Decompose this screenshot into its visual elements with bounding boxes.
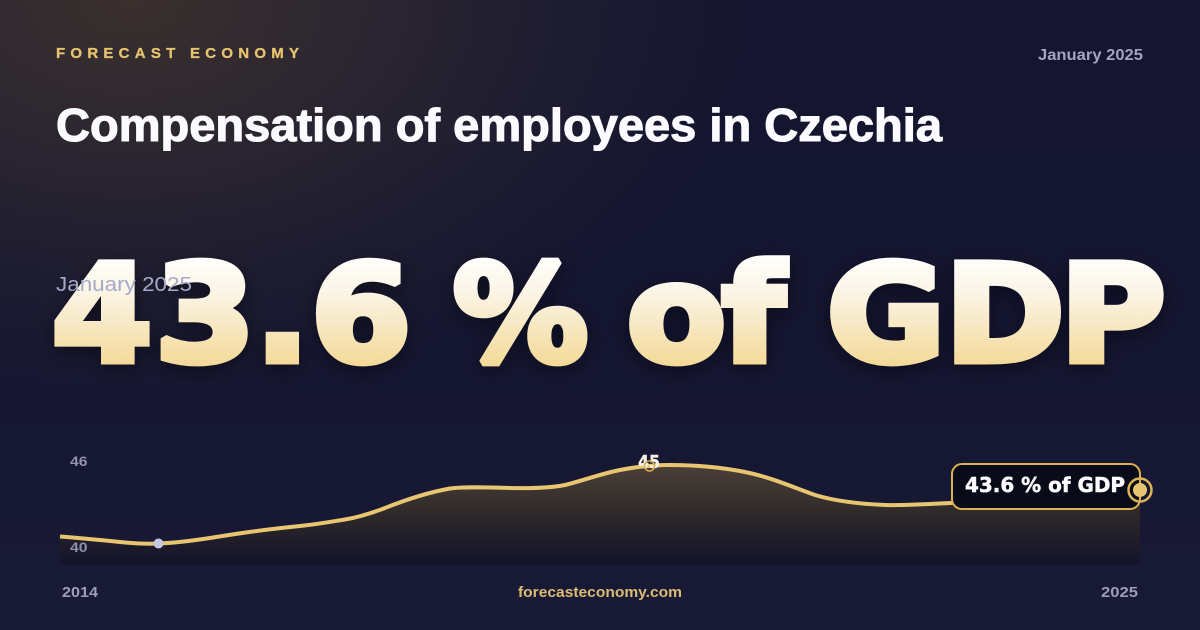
brand label: FORECAST ECONOMY <box>56 45 299 62</box>
min marker <box>154 538 164 548</box>
source url: forecasteconomy.com <box>518 585 682 601</box>
title: Compensation of employees in Czechia <box>56 99 942 151</box>
y axis label 46: 46 <box>70 453 88 469</box>
big value: GDP <box>827 236 1166 393</box>
start year: 2014 <box>62 584 99 601</box>
big value: % <box>453 236 588 393</box>
big value <box>52 236 1166 393</box>
big value: 43.6 <box>52 236 411 393</box>
max label: 45 <box>638 453 660 473</box>
date top right: January 2025 <box>1038 47 1143 64</box>
area fill <box>60 465 1140 565</box>
callout <box>952 464 1140 509</box>
end year: 2025 <box>1101 584 1138 601</box>
y axis label 40: 40 <box>70 539 88 555</box>
end marker <box>1128 478 1152 502</box>
big value: of <box>627 236 786 393</box>
date overlapping big value: January 2025 <box>56 274 192 296</box>
max marker <box>644 461 654 471</box>
line <box>60 465 1140 544</box>
chart <box>60 453 1152 565</box>
callout: 43.6 % of GDP <box>965 473 1125 497</box>
